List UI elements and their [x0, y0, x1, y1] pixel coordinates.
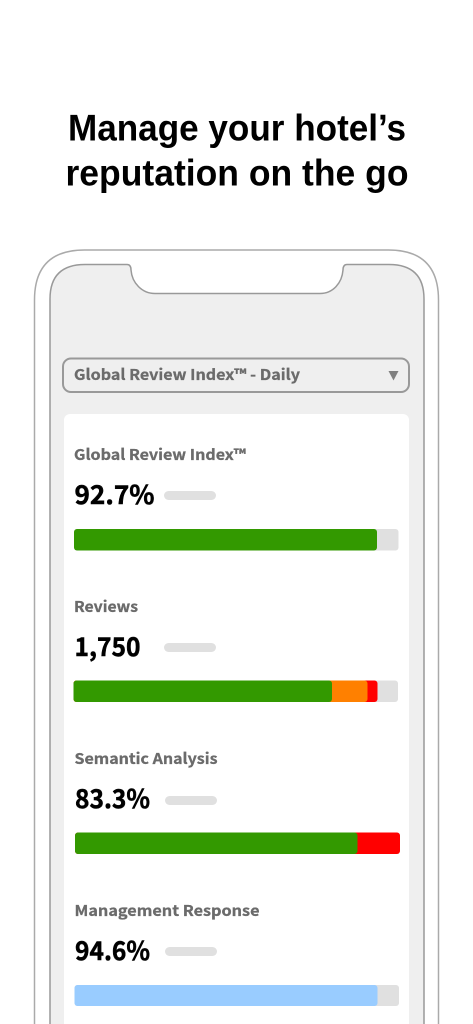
metric: Management Response: Management Response	[74, 900, 260, 921]
title	[66, 108, 408, 194]
metric: Semantic Analysis	[74, 748, 400, 854]
dropdown selector	[63, 358, 409, 392]
metric: Reviews: 1,750	[74, 627, 140, 664]
title: Manage your hotel’s	[68, 108, 406, 148]
metric: Management Response: 94.6%	[75, 931, 150, 968]
metric: Global Review Index	[74, 444, 398, 550]
metric: Semantic Analysis: 83.3%	[75, 779, 150, 816]
phone screen with notch	[50, 264, 424, 1024]
metric: Management Response	[74, 900, 399, 1006]
bar: Semantic Analysis	[75, 832, 400, 854]
icon: dropdown arrow	[388, 371, 398, 380]
metric: Global Review Index: 92.7%	[74, 475, 154, 512]
bar: Global Review Index	[74, 529, 398, 550]
panel: metrics card	[64, 414, 409, 1024]
bar: Reviews	[74, 680, 398, 702]
metric: Global Review Index: Global Review Index™	[74, 444, 246, 465]
dropdown selector: Global Review Index™ - Daily	[74, 364, 300, 385]
bar: Management Response	[74, 985, 399, 1006]
phone outer frame	[34, 250, 438, 1024]
metric: Semantic Analysis: Semantic Analysis	[74, 748, 218, 769]
metric: Reviews: Reviews	[74, 596, 138, 617]
metric: Reviews	[74, 596, 398, 702]
title: reputation on the go	[66, 152, 408, 194]
